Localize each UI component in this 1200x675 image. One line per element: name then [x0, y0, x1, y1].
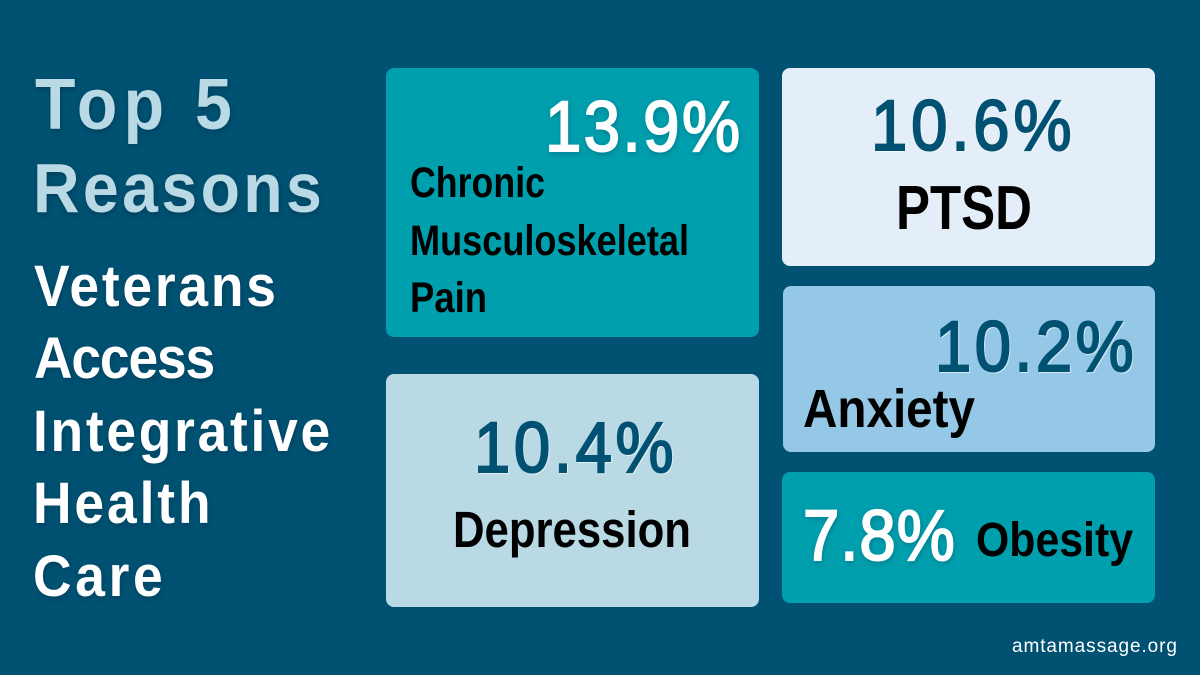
- subtitle: Veterans Access Integrative Health Care: Access: [34, 326, 215, 390]
- card background: [782, 68, 1155, 266]
- card background: [783, 286, 1155, 452]
- card background: [782, 472, 1155, 603]
- card background: [386, 68, 759, 337]
- label: Obesity: Obesity: [976, 514, 1133, 567]
- title: Top 5 Reasons: [33, 63, 322, 228]
- subtitle: Veterans Access Integrative Health Care: Veterans: [34, 254, 276, 318]
- stat: 13.9%: 13.9%: [545, 88, 740, 167]
- stat: 10.2%: 10.2%: [935, 308, 1134, 387]
- source: amtamassage.org: amtamassage.org: [1012, 636, 1177, 657]
- label: PTSD: PTSD: [896, 174, 1032, 243]
- stat: 7.8%: 7.8%: [803, 497, 955, 576]
- label: Chronic Musculoskeletal Pain: Musculoskeletal: [410, 217, 689, 265]
- subtitle: Veterans Access Integrative Health Care: Care: [33, 544, 163, 608]
- label: Anxiety: Anxiety: [803, 379, 975, 439]
- panel: depression: [386, 374, 759, 607]
- card background: [386, 374, 759, 607]
- stat: 10.4%: 10.4%: [474, 409, 674, 488]
- title: Top 5 Reasons: Top 5: [35, 63, 232, 145]
- label: Chronic Musculoskeletal Pain: Pain: [410, 274, 487, 322]
- panel: chronic musculoskeletal pain: [386, 68, 759, 337]
- panel: PTSD: [782, 68, 1155, 266]
- subtitle: Veterans Access Integrative Health Care: [33, 254, 330, 608]
- subtitle: Veterans Access Integrative Health Care: Integrative: [33, 399, 330, 463]
- label: Chronic Musculoskeletal Pain: Chronic: [410, 159, 545, 207]
- stat: 10.6%: 10.6%: [871, 87, 1072, 166]
- title: Top 5 Reasons: Reasons: [33, 150, 322, 228]
- label: Chronic Musculoskeletal Pain: [410, 159, 689, 322]
- label: Depression: Depression: [453, 501, 691, 558]
- panel: anxiety: [783, 286, 1155, 452]
- panel: obesity: [782, 472, 1155, 603]
- subtitle: Veterans Access Integrative Health Care: Health: [33, 471, 211, 535]
